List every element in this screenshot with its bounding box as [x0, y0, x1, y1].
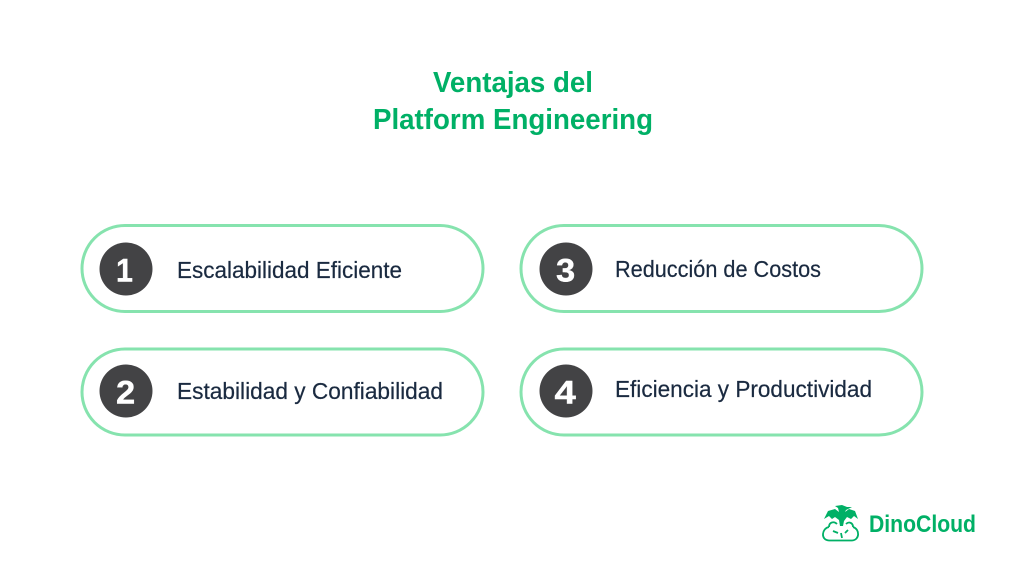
panel: item 3 [521, 226, 922, 312]
panel: item 4: Eficiencia y Productividad [615, 376, 872, 402]
logo: DinoCloud [823, 505, 976, 540]
title: Ventajas del [433, 67, 593, 99]
panel: item 1 [82, 226, 483, 312]
panel: item 2 [82, 349, 483, 435]
panel: item 1: 1 [116, 253, 133, 289]
panel: item 4 [521, 349, 922, 435]
title [373, 67, 653, 136]
panel: item 1: Escalabilidad Eficiente [177, 257, 402, 283]
title: Platform Engineering [373, 104, 653, 136]
wordmark: DinoCloud [869, 511, 976, 538]
panel: item 3: Reducción de Costos [615, 256, 821, 282]
panel: item 2: 2 [116, 376, 135, 411]
panel: item 2: Estabilidad y Confiabilidad [177, 378, 443, 404]
panel: item 4: 4 [554, 375, 576, 411]
icon: dinosaur over cloud [823, 505, 858, 540]
panel: item 3: 3 [556, 254, 575, 289]
